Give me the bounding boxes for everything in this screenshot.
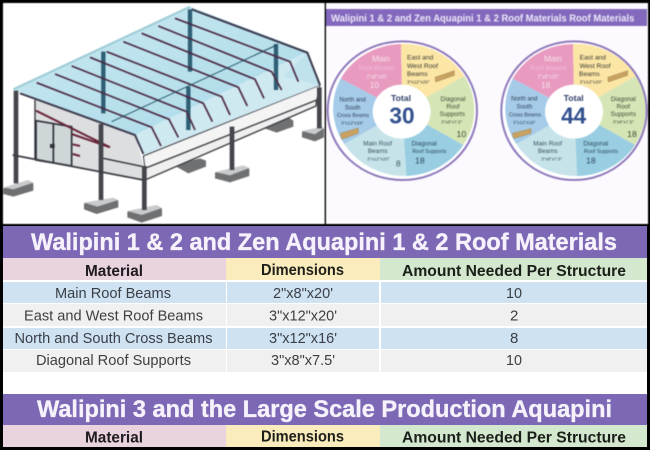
table: second table header row: Amount Needed Per Structure [402, 430, 626, 446]
chart: left pie total 30: 10 [457, 129, 466, 139]
chart: right pie total 44: Roof [617, 104, 630, 111]
chart: left pie total 30: Supports [440, 111, 465, 118]
chart: left pie total 30: Cross Beams [337, 113, 369, 119]
chart: left pie total 30: 10 [370, 80, 379, 90]
chart: right pie total 44: Roof Beams [530, 65, 567, 72]
chart: right pie total 44: 3"x8"x7.5" [613, 120, 634, 125]
table: row main roof beams [3, 282, 647, 303]
chart: right pie total 44: Supports [611, 111, 636, 118]
chart: right pie total 44: East and [580, 54, 606, 61]
heading: first table title: Walipini 1 & 2 and Zen Aquapini 1 & 2 Roof Materials [31, 229, 617, 256]
panel: roof materials pie charts [325, 2, 649, 225]
table: row north and south cross beams: North and South Cross Beams [14, 330, 212, 347]
chart: left pie total 30: West Roof [407, 63, 438, 70]
chart: left pie total 30: Beams [407, 71, 428, 78]
chart: right pie total 44: 18 [627, 129, 637, 139]
icon: white planter band [143, 85, 320, 180]
table: row north and south cross beams: 3"x12"x16' [269, 330, 337, 347]
chart: right pie total 44: 3"x12"x16" [513, 120, 536, 125]
chart: left pie total 30: North and [339, 97, 366, 103]
chart: right pie total 44: Beams [538, 148, 558, 155]
chart: left pie total 30: 30 [389, 102, 415, 128]
chart: right pie total 44: Main [544, 54, 562, 64]
chart: right pie total 44: South [516, 105, 532, 111]
panel: roof materials tables [3, 226, 647, 447]
table: first table header row: Amount Needed Per Structure [402, 263, 626, 280]
table: second table header row [3, 425, 647, 447]
table: first table header row: Material [85, 263, 143, 280]
chart: right pie total 44: West Roof [580, 63, 611, 70]
chart: right pie total 44: 18 [586, 155, 596, 165]
chart: left pie total 30: 8 [396, 159, 401, 169]
table: row east and west roof beams: 2 [510, 308, 518, 324]
chart: left pie total 30: Beams [368, 148, 388, 155]
chart: left pie total 30: 3"x8"x7.5" [441, 120, 463, 125]
icon: concrete footings [3, 117, 324, 223]
heading: second table title: Walipini 3 and the Large Scale Production Aquapini [37, 396, 612, 423]
chart: right pie total 44: Roof Supports [584, 149, 618, 155]
chart: left pie total 30: Total [391, 93, 411, 103]
table: first table header row [3, 258, 647, 280]
table: row main roof beams: 2"x8"x20' [273, 285, 333, 302]
chart: left pie total 30: Roof Beams [358, 65, 396, 72]
chart: left pie total 30: 3"x12"x20" [407, 80, 430, 85]
chart: right pie total 44: Diagonal [583, 141, 608, 148]
icon: vertical support posts [103, 9, 276, 130]
table: row main roof beams: 10 [506, 285, 522, 302]
heading: pie chart banner [326, 9, 647, 26]
chart: left pie total 30: 18 [415, 155, 425, 165]
chart: left pie total 30: Main [372, 54, 390, 64]
icon: maroon roof beams [20, 9, 320, 154]
chart: right pie total 44: 2"x8"x20" [538, 75, 559, 81]
chart: right pie total 44: Beams [579, 71, 600, 78]
table: row east and west roof beams [3, 304, 647, 326]
chart: left pie total 30 [328, 41, 477, 180]
chart: right pie total 44 [501, 41, 647, 180]
chart: left pie total 30: 2"x8"x20' [366, 75, 387, 81]
chart: left pie total 30: 3"x12"x20" [367, 156, 390, 161]
chart: left pie total 30: Diagonal [441, 96, 465, 103]
chart: right pie total 44: Diagonal [611, 96, 636, 103]
table: second table header row: Dimensions [261, 428, 344, 446]
chart: right pie total 44: 44 [561, 102, 587, 128]
table: first table header row: Dimensions [261, 262, 344, 279]
table: second table header row: Material [85, 430, 143, 446]
chart: left pie total 30: Roof Supports [412, 149, 447, 155]
chart: right pie total 44: Total [564, 93, 584, 103]
chart: left pie total 30: Main Roof [363, 141, 392, 148]
table: row north and south cross beams [3, 328, 647, 349]
chart: right pie total 44: 3"x12"x20" [580, 80, 603, 85]
table: row diagonal roof supports: Diagonal Roof Supports [36, 352, 191, 369]
chart: left pie total 30: East and [407, 54, 434, 61]
icon: side wall and door [35, 100, 143, 180]
panel: greenhouse roof structure illustration [2, 2, 326, 225]
table: row main roof beams: Main Roof Beams [55, 285, 171, 302]
chart: left pie total 30: South [345, 106, 361, 112]
chart: right pie total 44: Cross Beams [509, 112, 541, 118]
icon: steel columns [13, 87, 319, 210]
table: row diagonal roof supports: 3"x8"x7.5' [271, 352, 335, 369]
table: row east and west roof beams: 3"x12"x20' [269, 308, 337, 324]
table: row diagonal roof supports: 10 [506, 352, 522, 369]
chart: left pie total 30: Diagonal [412, 141, 437, 148]
chart: left pie total 30: 3"x12"x16" [341, 121, 364, 126]
chart: right pie total 44: North and [511, 97, 538, 103]
icon: glass roof panes [13, 7, 320, 155]
chart: right pie total 44: Main Roof [533, 141, 562, 148]
chart: right pie total 44: 3"x8"x7.5" [541, 156, 563, 161]
table: row north and south cross beams: 8 [510, 330, 518, 347]
chart: right pie total 44: 18 [541, 80, 551, 90]
heading: pie chart banner: Walipini 1 & 2 and Zen Aquapini 1 & 2 Roof Materials Roof Materials [331, 13, 635, 24]
table: row east and west roof beams: East and West Roof Beams [24, 308, 203, 324]
chart: left pie total 30: Roof [446, 104, 460, 111]
table: row diagonal roof supports [3, 350, 647, 372]
